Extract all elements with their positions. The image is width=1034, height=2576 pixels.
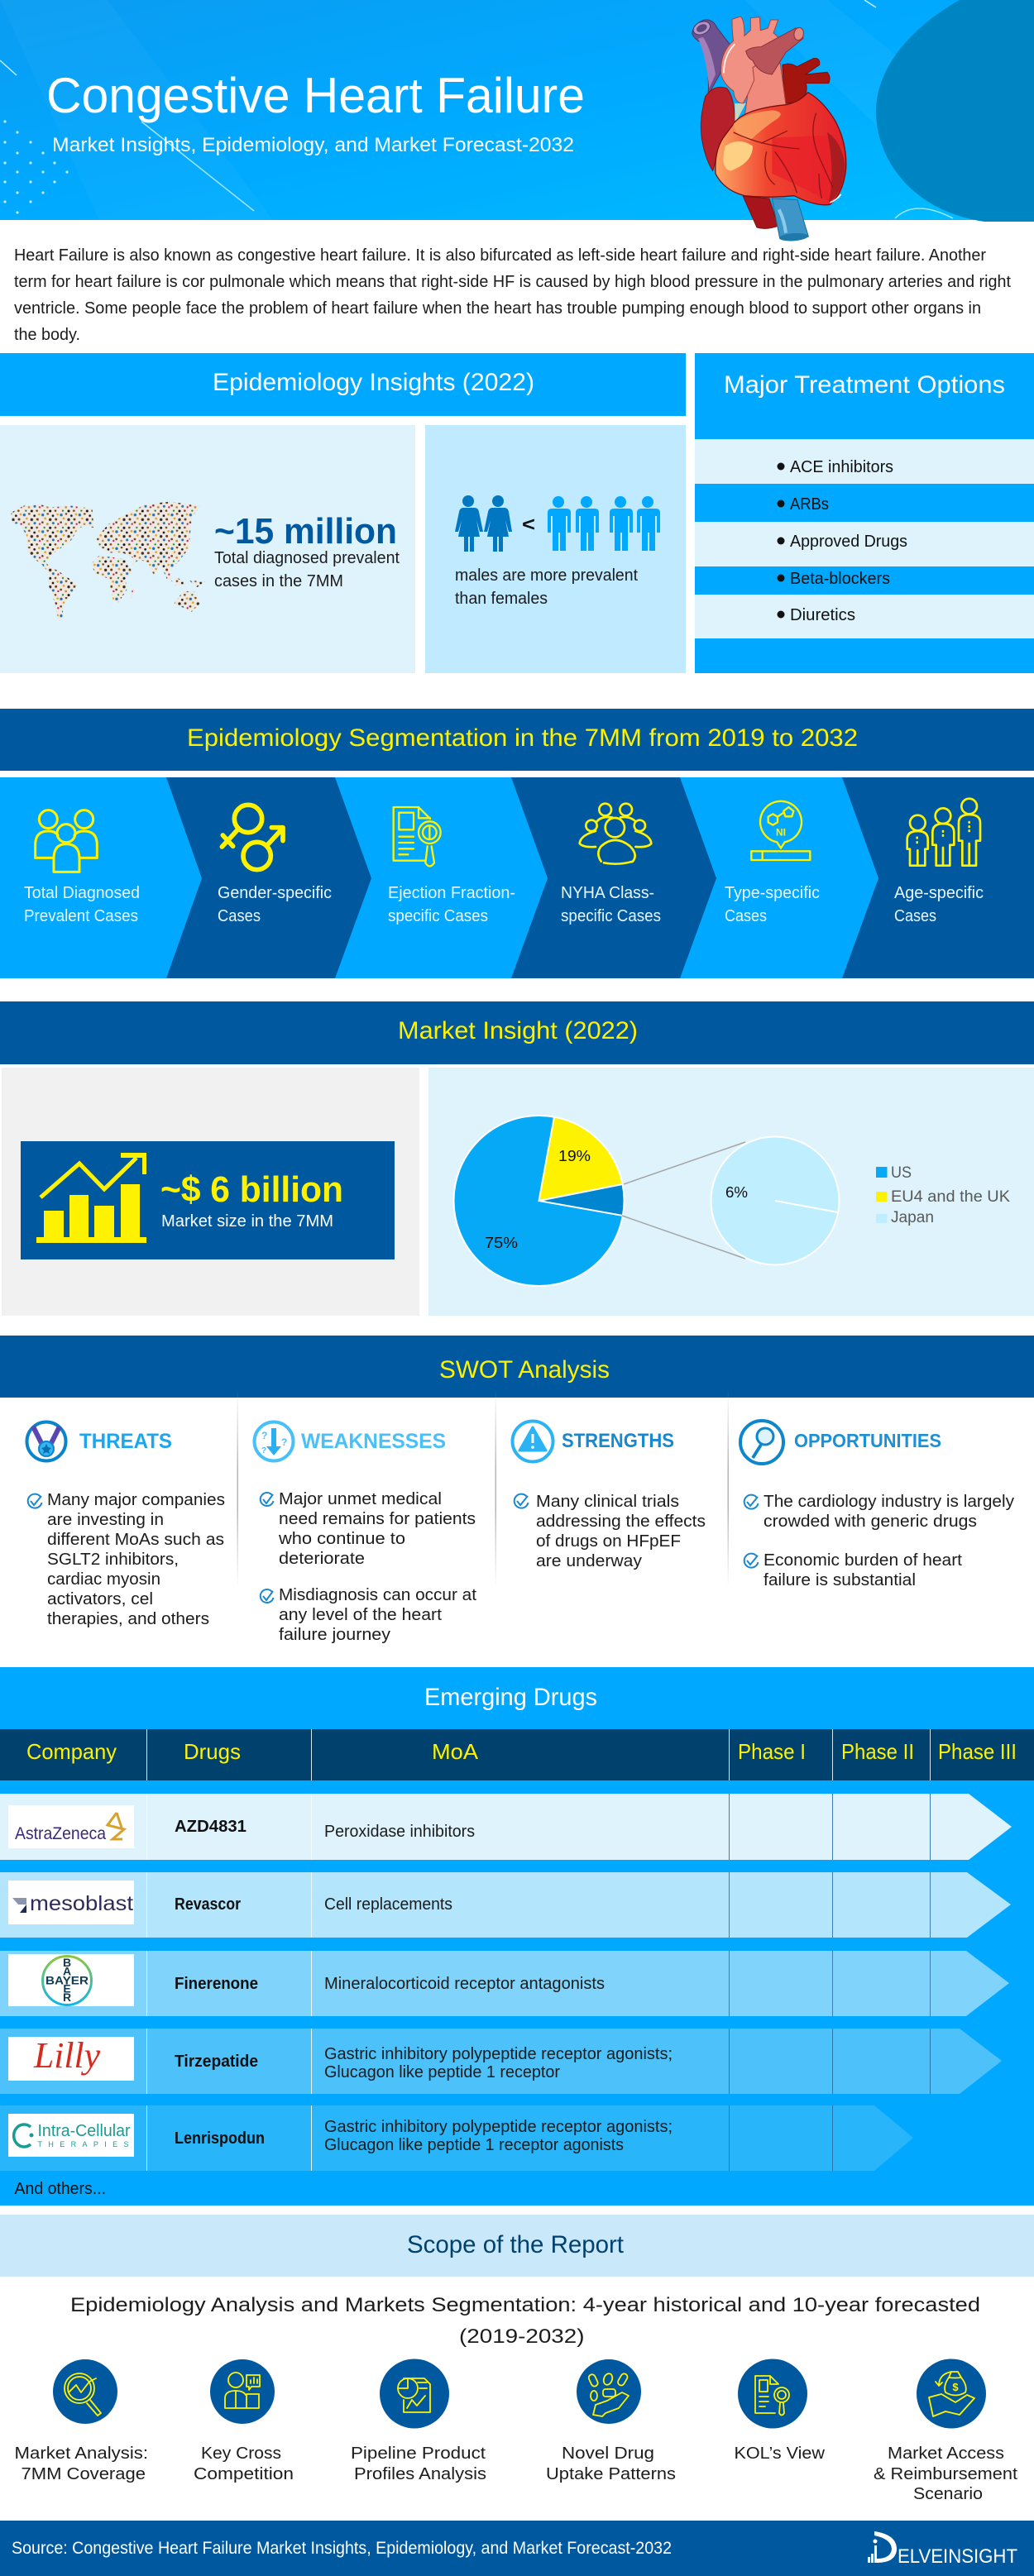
note: and others: And others... [15,2180,106,2198]
list: treatments [778,458,907,624]
logo: Bayer: E [63,1981,71,1995]
caption: males more prevalent: males are more prevalent [455,566,638,585]
legend: US [891,1164,912,1182]
bullets: weaknesses: deteriorate [279,1550,365,1568]
row: Finerenone: Mineralocorticoid receptor antagonists [324,1975,605,1993]
row: AZD4831 [0,1794,1012,1860]
column: weaknesses [255,1422,476,1644]
logo: DelveInsight [868,2531,1017,2568]
row: Lenrispodun: Lenrispodun [175,2129,265,2148]
bullets: opportunities: failure is substantial [764,1571,916,1589]
symbol: less than: < [522,514,535,536]
scope item: market access [874,2359,1017,2503]
scope item: key cross competition [194,2359,294,2483]
heading: scope of the report: Scope of the Report [407,2231,625,2258]
stat: 15 million: ~15 million [214,511,397,552]
label [874,2445,1017,2503]
label: Market Access [888,2445,1004,2463]
bullets: opportunities: crowded with generic drugs [764,1513,977,1531]
heading: emerging drugs: Emerging Drugs [424,1684,597,1711]
row: Lenrispodun: Glucagon like peptide 1 receptor agonists [324,2136,624,2154]
bullet: threats: cardiac myosin [47,1570,160,1589]
row: Tirzepatide [0,2029,1002,2094]
row: Finerenone [0,1951,1009,2016]
bullets: weaknesses: failure journey [279,1626,390,1644]
logo: AstraZeneca: AstraZeneca [15,1824,106,1843]
scope item: market analysis [15,2359,148,2483]
heading: opportunities: OPPORTUNITIES [794,1430,941,1451]
logo: Bayer: BAYER [45,1973,89,1986]
table header: Drugs [184,1739,241,1764]
scope description: (2019-2032) [459,2325,584,2348]
scope item: market access: $ [952,2381,959,2393]
bullets: opportunities [744,1493,1014,1589]
intro paragraph: the body. [14,326,80,344]
column: strengths [513,1421,706,1570]
label: 7MM Coverage [22,2465,146,2483]
panel: male versus female prevalence [425,425,686,673]
legend: Japan [891,1209,934,1226]
panel: market size [2,1068,419,1316]
column: opportunities [740,1421,1014,1589]
label: & Reimbursement [874,2465,1017,2483]
icon: magnifier chart [65,2373,101,2416]
caption: market size: Market size in the 7MM [161,1212,333,1231]
icon: molecule with book: NI [776,827,786,839]
label: Market Analysis: [15,2445,148,2463]
logo: AstraZeneca [8,1805,134,1848]
icon: two females [455,495,512,552]
data labels: 19% [558,1148,591,1164]
icon: people [36,810,97,872]
bullets: weaknesses: Major unmet medical [279,1490,442,1508]
bullet: strengths: Many clinical trials [536,1493,679,1511]
icon: report with pie chart [398,2378,430,2412]
list: treatments: ACE inhibitors [790,458,893,476]
header banner [0,0,1034,222]
labels: segmentation categories: Total Diagnosed [24,884,140,902]
footer [0,2521,1034,2576]
icon: magnifier [740,1421,783,1464]
caption: total diagnosed [214,549,400,590]
heading: market insight: Market Insight (2022) [398,1017,638,1044]
label: KOL’s View [735,2445,826,2463]
bullet: threats: SGLT2 inhibitors, [47,1551,179,1569]
labels: segmentation categories: Ejection Fraction- [388,884,515,902]
caption: total diagnosed: Total diagnosed prevalent [214,549,400,567]
intro paragraph [14,246,1011,344]
pie chart: market share by region [453,1116,839,1286]
label: Competition [194,2465,294,2483]
logo: Intra-Cellular Therapies [8,2114,134,2157]
data labels: 75% [485,1235,518,1251]
icon: pills over hand [587,2373,629,2416]
heading: epidemiology segmentation [0,709,1034,771]
label: Pipeline Product [351,2445,486,2463]
labels: segmentation categories: Cases [894,907,936,925]
row: Revascor: Cell replacements [324,1895,452,1914]
icon: four males [548,496,660,551]
row: AZD4831: AZD4831 [175,1818,247,1836]
icon: molecule with book [751,801,810,860]
table header: MoA [432,1739,479,1764]
labels: segmentation categories: Gender-specific [218,884,332,902]
icon: medal [26,1422,66,1460]
row: Lenrispodun [0,2105,913,2171]
data labels [485,1148,748,1251]
bullet: strengths: addressing the effects [536,1513,706,1531]
icon: down arrow with question marks: ? [261,1430,267,1441]
bullet: threats [28,1491,225,1628]
labels: segmentation categories [24,884,984,925]
label [546,2445,676,2483]
row: Revascor [0,1872,1011,1938]
row: Finerenone: Finerenone [175,1975,258,1993]
bullet: strengths: of drugs on HFpEF [536,1532,681,1551]
list: treatments: ARBs [790,495,829,514]
row: Tirzepatide: Tirzepatide [175,2053,258,2071]
label: Profiles Analysis [354,2465,486,2483]
caption: males more prevalent [455,566,638,608]
logo: DelveInsight: ELVEINSIGHT [898,2545,1017,2568]
icon: down arrow with question marks: ? [281,1436,287,1448]
label: Novel Drug [562,2445,654,2463]
row: Revascor: Revascor [175,1895,241,1914]
logo: Intra-Cellular Therapies: Intra-Cellular [38,2122,131,2140]
bullets: weaknesses: Misdiagnosis can occur at [279,1586,476,1604]
table header: Phase III [938,1739,1017,1764]
scope item: novel drug uptake [546,2359,676,2483]
label [194,2445,294,2483]
logo: Intra-Cellular Therapies: THERAPIES [38,2140,129,2148]
logo: mesoblast [8,1881,134,1924]
list: treatments: Diuretics [790,606,855,624]
label: Key Cross [201,2445,281,2463]
bullet: threats: Many major companies [47,1491,225,1509]
icon: group of people [580,804,651,864]
labels: segmentation categories: Cases [725,907,767,925]
row: Tirzepatide: Gastric inhibitory polypeptide receptor agonists; [324,2045,673,2063]
logo: Bayer: R [63,1991,71,2004]
heading: market insight [0,1001,1034,1064]
subtitle: Market Insights, Epidemiology, and Market Forecast-2032 [52,134,574,156]
bullets: weaknesses: who continue to [278,1530,405,1548]
label: Scenario [913,2485,983,2503]
labels: segmentation categories: Age-specific [894,884,984,902]
heading: strengths: STRENGTHS [562,1430,674,1452]
label [351,2445,486,2483]
row: Tirzepatide: Glucagon like peptide 1 receptor [324,2063,560,2081]
icon: gender symbols [222,805,283,870]
labels: segmentation categories: specific Cases [388,907,488,925]
table header: Company [26,1739,117,1764]
bullet: threats: different MoAs such as [47,1531,224,1549]
table header [0,1729,1034,1780]
bullets: opportunities: Economic burden of heart [764,1551,962,1570]
heading: epidemiology insights [0,353,686,416]
caption: males more prevalent: than females [455,590,548,608]
scope description: Epidemiology Analysis and Markets Segmentation: 4-year historical and 10-year forecasted [70,2294,980,2316]
bullets: weaknesses [261,1490,476,1644]
scope description [70,2294,980,2348]
icon: analyst with charts [225,2373,260,2408]
row: AZD4831: Peroxidase inhibitors [324,1823,475,1841]
legend [876,1164,1010,1226]
bullets: opportunities: The cardiology industry is largely [764,1493,1014,1511]
heading: treatment options: Major Treatment Options [724,371,1005,399]
scope item: pipeline product profiles [351,2359,486,2483]
label [15,2445,148,2483]
bullets: weaknesses: need remains for patients [279,1510,476,1528]
icon: down arrow with question marks: ? [261,1446,266,1455]
bullet: threats: therapies, and others [47,1610,209,1628]
labels: segmentation categories: NYHA Class- [561,884,654,902]
title: Congestive Heart Failure [46,68,585,123]
labels: segmentation categories: specific Cases [561,907,661,925]
logo: Bayer: B [63,1956,71,1969]
chevron process: segmentation categories [0,777,1034,978]
icon: growth chart [36,1153,146,1243]
label: Uptake Patterns [546,2465,676,2483]
heading: threats: THREATS [79,1430,172,1453]
source line: Source: Congestive Heart Failure Market Insights, Epidemiology, and Market Forecast-2032 [12,2539,672,2558]
icon: document with magnifier [394,807,441,866]
icon: down arrow with question marks [255,1422,293,1460]
scope item: KOL's view [735,2359,826,2463]
legend: EU4 and the UK [891,1188,1010,1206]
illustration: anatomical heart [692,17,846,242]
panel: major treatment options [695,353,1034,673]
table header: Phase I [738,1739,806,1764]
heading: scope of the report [0,2215,1034,2277]
row: Lenrispodun: Gastric inhibitory polypeptide receptor agonists; [324,2118,673,2136]
heading: SWOT analysis [0,1336,1034,1398]
icon: world map of people [11,502,205,620]
data labels: 6% [725,1184,748,1201]
heading: SWOT analysis: SWOT Analysis [439,1356,610,1384]
icon: money bag and hand [929,2372,974,2416]
panel: total prevalent cases [0,425,415,673]
logo: mesoblast: mesoblast [30,1892,133,1915]
column: threats [26,1422,225,1628]
labels: segmentation categories: Type-specific [725,884,820,902]
list: treatments: Beta-blockers [790,570,890,588]
icon: age groups [907,799,980,866]
bullets: weaknesses: any level of the heart [279,1606,442,1624]
heading: weaknesses: WEAKNESSES [301,1430,446,1453]
list: treatments: Approved Drugs [790,533,907,551]
caption: total diagnosed: cases in the 7MM [214,572,343,590]
intro paragraph: ventricle. Some people face the problem of heart failure when the heart has trouble pumping enough blood to support other organs in [14,299,981,318]
icon: document with magnifier [755,2376,789,2415]
logo: Lilly: Lilly [33,2035,100,2076]
heading: epidemiology segmentation: Epidemiology Segmentation in the 7MM from 2019 to 2032 [187,724,858,752]
heading: epidemiology insights: Epidemiology Insights (2022) [213,369,534,396]
labels: segmentation categories: Cases [218,907,261,925]
bullet: strengths: are underway [536,1552,642,1570]
intro paragraph: term for heart failure is cor pulmonale which means that right-side HF is caused by high blood pressure in the pulmonary arteries and right [14,273,1011,291]
panel: emerging drugs [0,1667,1034,2206]
logo: Lilly [8,2035,134,2081]
icon: warning triangle [513,1421,553,1462]
intro paragraph: Heart Failure is also known as congestive heart failure. It is also bifurcated as left-side heart failure and right-side heart failure. Another [14,246,986,265]
bullet: strengths [515,1493,706,1570]
table header: Phase II [841,1739,914,1764]
logo: Bayer: A [63,1965,71,1978]
labels: segmentation categories: Prevalent Cases [24,907,138,925]
bullet: threats: are investing in [47,1511,164,1529]
panel: market share chart [428,1068,1034,1316]
bullet: threats: activators, cel [47,1590,153,1608]
logo: Bayer [8,1954,134,2006]
stat: 6 billion: ~$ 6 billion [160,1169,343,1210]
